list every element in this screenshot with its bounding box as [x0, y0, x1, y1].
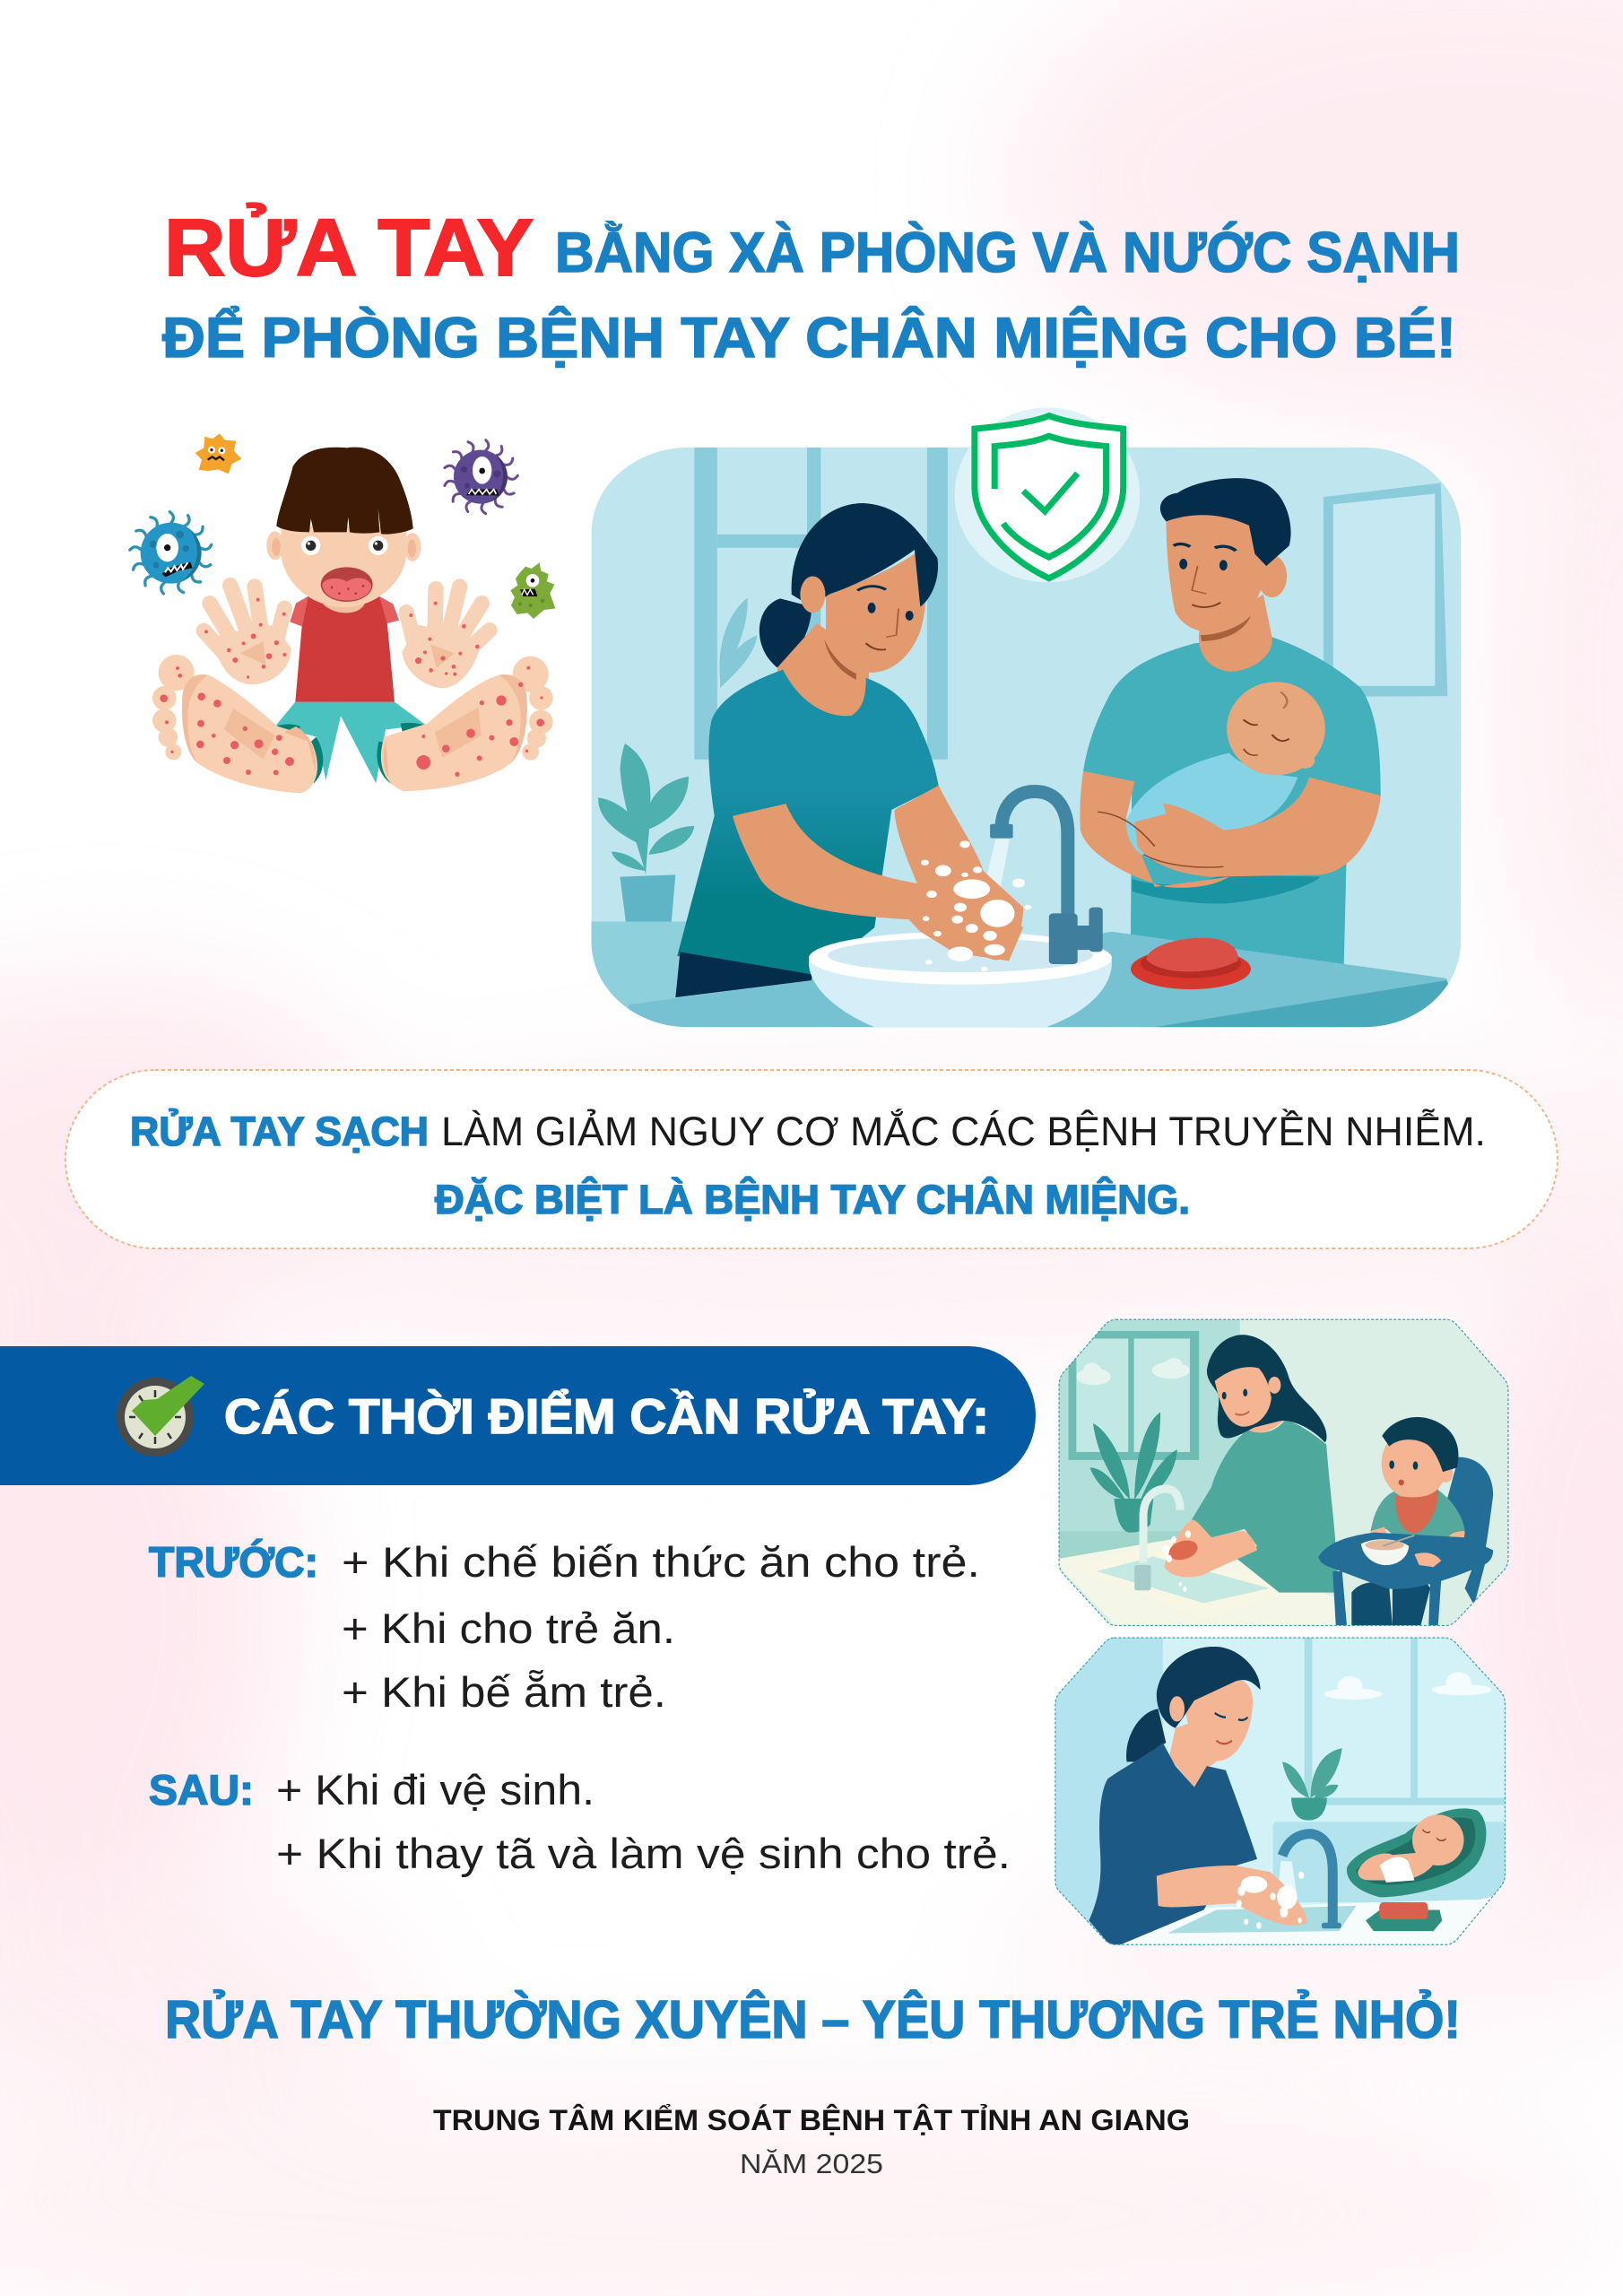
list: after: SAU: — [149, 1766, 254, 1813]
counter — [1113, 1893, 1505, 1944]
illustration: child with hand foot mouth disease and germs — [130, 433, 555, 793]
woman — [675, 503, 939, 997]
scene content — [592, 448, 1463, 1027]
section banner — [0, 1346, 1036, 1485]
feet with rash — [152, 655, 553, 793]
slogan: RỬA TAY THƯỜNG XUYÊN – YÊU THƯƠNG TRẺ NHỎ! — [165, 1989, 1461, 2049]
background plant — [719, 597, 758, 688]
back counter — [592, 921, 820, 1027]
toddler in high chair — [1318, 1417, 1493, 1625]
mother — [1089, 1647, 1306, 1948]
icon: green shield with check — [955, 408, 1140, 582]
sink — [809, 932, 1112, 1027]
icon: purple germ — [444, 440, 517, 514]
icon: green germ — [510, 562, 555, 619]
baby in seat — [1347, 1808, 1486, 1897]
title: BẰNG XÀ PHÒNG VÀ NƯỚC SẠNH — [555, 221, 1460, 284]
illustrations: washing before feeding and after changing — [1053, 1313, 1512, 1948]
illustration: parents washing hands with baby — [592, 408, 1463, 1027]
soap and dish — [1131, 938, 1251, 989]
mother — [1162, 1335, 1338, 1593]
baby — [1126, 682, 1325, 858]
faucet — [982, 792, 1103, 964]
wall picture — [1324, 483, 1447, 697]
footer year: NĂM 2025 — [740, 2148, 883, 2179]
counter — [629, 932, 1461, 1027]
list: before: TRƯỚC: — [149, 1538, 318, 1586]
plant — [1089, 1413, 1177, 1533]
soap dish — [1366, 1902, 1442, 1931]
section banner: CÁC THỜI ĐIỂM CẦN RỬA TAY: — [224, 1388, 989, 1444]
list: before: + Khi cho trẻ ăn. — [342, 1605, 675, 1652]
child body — [275, 596, 426, 785]
man — [1080, 478, 1381, 980]
callout: clean hands message: LÀM GIẢM NGUY CƠ MẮC CÁC BỆNH TRUYỀN NHIỄM. — [441, 1109, 1486, 1154]
list: after — [149, 1766, 1011, 1877]
scene background — [592, 448, 1461, 1027]
plant — [1282, 1748, 1342, 1821]
faucet — [1278, 1834, 1341, 1928]
title — [162, 202, 1460, 370]
panel: mother and toddler — [1053, 1313, 1512, 1631]
icon: blue germ — [130, 512, 212, 594]
title: ĐỂ PHÒNG BỆNH TAY CHÂN MIỆNG CHO BÉ! — [162, 306, 1456, 370]
callout: clean hands message — [65, 1070, 1558, 1248]
window — [1305, 1638, 1506, 1805]
hands with rash — [204, 586, 490, 688]
icon: orange germ — [195, 433, 241, 474]
child head — [266, 448, 421, 613]
icon: clock with check — [117, 1376, 204, 1457]
potted plant — [598, 744, 694, 921]
woman arms and hands — [733, 786, 1023, 961]
callout: clean hands message: RỬA TAY SẠCH — [130, 1109, 429, 1154]
window — [1069, 1331, 1199, 1460]
footer organisation: TRUNG TÂM KIỂM SOÁT BỆNH TẬT TỈNH AN GIANG — [433, 2104, 1190, 2136]
foam bubbles — [921, 840, 1031, 971]
list: before: + Khi bế ẵm trẻ. — [342, 1668, 666, 1716]
list: before — [149, 1538, 980, 1716]
foam — [1237, 1872, 1304, 1929]
list: before: + Khi chế biến thức ăn cho trẻ. — [342, 1538, 980, 1586]
counter and sink — [1059, 1489, 1347, 1625]
title: RỬA TAY — [164, 202, 534, 293]
callout: clean hands message: ĐẶC BIỆT LÀ BỆNH TAY CHÂN MIỆNG. — [435, 1177, 1190, 1222]
window — [694, 448, 948, 760]
list: after: + Khi đi vệ sinh. — [276, 1766, 595, 1813]
panel: mother and infant — [1053, 1635, 1509, 1948]
list: after: + Khi thay tã và làm vệ sinh cho trẻ. — [276, 1830, 1011, 1877]
